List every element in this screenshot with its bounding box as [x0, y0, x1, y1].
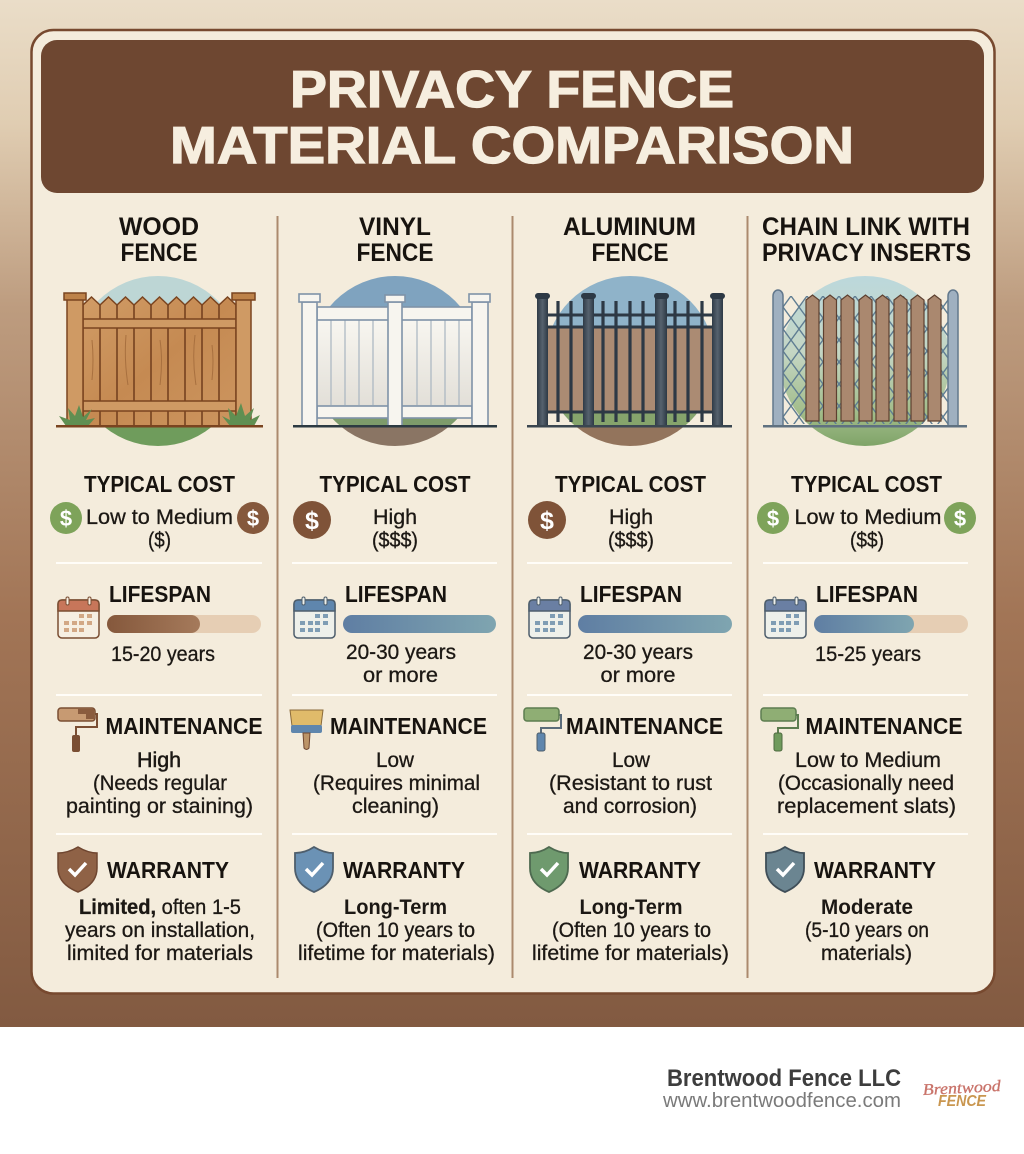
icon: dollar coin: $ — [540, 507, 554, 535]
heading: chain link: PRIVACY INSERTS — [762, 239, 971, 267]
maintenance: wood: (Needs regular — [93, 772, 227, 795]
maintenance: chain link: MAINTENANCE — [806, 713, 962, 739]
icon: dollar coin brown: $ — [247, 506, 259, 531]
maintenance: aluminum: (Resistant to rust — [549, 772, 712, 795]
icon: shield — [58, 847, 97, 892]
footer: company name and website — [662, 1065, 901, 1112]
typical cost: wood: ($) — [148, 529, 171, 552]
heading: wood fence: WOOD — [119, 213, 199, 241]
heading: vinyl fence: VINYL — [359, 213, 431, 241]
icon: calendar — [529, 597, 570, 638]
lifespan bar — [578, 615, 732, 633]
warranty: chain link: Moderate — [821, 896, 913, 919]
title banner: MATERIAL COMPARISON — [170, 117, 854, 175]
typical cost: aluminum: High — [609, 506, 653, 529]
section dividers — [56, 563, 968, 834]
warranty: wood: WARRANTY — [107, 857, 229, 883]
icon: dollar coin: $ — [305, 507, 319, 535]
heading: aluminum fence: FENCE — [592, 239, 668, 267]
warranty: aluminum — [530, 847, 729, 965]
warranty: vinyl: WARRANTY — [343, 857, 465, 883]
icon: dollar coin — [293, 501, 331, 539]
typical cost: aluminum: TYPICAL COST — [555, 471, 706, 497]
column dividers — [278, 216, 748, 978]
typical cost: aluminum: ($$$) — [608, 529, 654, 552]
maintenance: chain link — [761, 708, 962, 818]
icon: dollar coin green: $ — [767, 506, 779, 531]
warranty: vinyl — [295, 847, 495, 965]
icon: dollar coin green: $ — [954, 506, 966, 531]
lifespan: aluminum — [529, 581, 732, 687]
illustration: aluminum fence — [527, 270, 732, 451]
typical cost: chain link: TYPICAL COST — [791, 471, 942, 497]
lifespan: chain link: 15-25 years — [815, 643, 921, 666]
lifespan bar — [107, 615, 261, 633]
maintenance: aluminum: MAINTENANCE — [566, 713, 723, 739]
typical cost: wood: Low to Medium — [86, 506, 233, 529]
icon: dollar coin brown — [237, 502, 269, 534]
warranty: wood: years on installation, — [65, 919, 255, 942]
icon: shield — [295, 847, 333, 892]
lifespan: aluminum: LIFESPAN — [580, 581, 682, 607]
maintenance: aluminum: and corrosion) — [563, 795, 697, 818]
warranty: wood: Limited, often 1-5 — [79, 896, 241, 919]
warranty: vinyl: (Often 10 years to — [316, 919, 475, 942]
icon: calendar — [294, 597, 335, 638]
icon: calendar — [58, 597, 99, 638]
title banner — [41, 40, 984, 193]
lifespan bar — [814, 615, 968, 633]
maintenance: aluminum: Low — [612, 749, 651, 772]
icon: shield — [530, 847, 568, 892]
warranty: aluminum: WARRANTY — [579, 857, 701, 883]
warranty: aluminum: (Often 10 years to — [552, 919, 711, 942]
typical cost: chain link: ($$) — [850, 529, 884, 552]
maintenance: wood: painting or staining) — [66, 795, 253, 818]
warranty: chain link: (5-10 years on — [805, 919, 929, 942]
footer: logo: FENCE — [938, 1093, 987, 1110]
heading: chain link — [762, 213, 971, 267]
lifespan: vinyl — [294, 581, 496, 687]
lifespan: chain link: LIFESPAN — [816, 581, 918, 607]
lifespan: aluminum: or more — [600, 664, 676, 687]
column: wood fence — [50, 213, 269, 965]
maintenance: chain link: (Occasionally need — [778, 772, 954, 795]
icon: paint roller — [524, 708, 561, 751]
lifespan: vinyl: LIFESPAN — [345, 581, 447, 607]
column: vinyl fence — [290, 213, 497, 965]
typical cost: wood — [50, 471, 269, 552]
maintenance: vinyl: (Requires minimal — [313, 772, 480, 795]
main panel — [32, 30, 994, 994]
maintenance: chain link: Low to Medium — [795, 749, 941, 772]
maintenance: wood — [58, 708, 262, 818]
illustration: chain link fence — [763, 276, 967, 446]
typical cost: aluminum — [528, 471, 706, 552]
maintenance: wood: MAINTENANCE — [106, 713, 262, 739]
warranty: aluminum: lifetime for materials) — [532, 942, 729, 965]
warranty: chain link: WARRANTY — [814, 857, 936, 883]
warranty: vinyl: lifetime for materials) — [298, 942, 495, 965]
typical cost: vinyl: High — [373, 506, 417, 529]
heading: wood fence — [119, 213, 199, 267]
icon: dollar coin green: $ — [60, 506, 72, 531]
warranty: chain link — [766, 847, 936, 965]
lifespan: vinyl: or more — [363, 664, 438, 687]
illustration: wood fence — [56, 270, 263, 451]
lifespan bar — [343, 615, 496, 633]
warranty: chain link: materials) — [821, 942, 912, 965]
lifespan: wood: LIFESPAN — [109, 581, 211, 607]
warranty: wood — [58, 847, 255, 965]
icon: paint brush — [290, 710, 323, 750]
typical cost: wood: TYPICAL COST — [84, 471, 235, 497]
heading: chain link: CHAIN LINK WITH — [762, 213, 970, 241]
heading: vinyl fence — [356, 213, 434, 267]
typical cost: vinyl — [293, 471, 470, 552]
footer: logo — [922, 1078, 1002, 1110]
column: aluminum fence — [524, 213, 732, 965]
maintenance: aluminum — [524, 708, 723, 818]
icon: dollar coin green — [944, 502, 976, 534]
lifespan: chain link — [765, 581, 968, 666]
warranty: aluminum: Long-Term — [580, 896, 682, 919]
icon: dollar coin green — [757, 502, 789, 534]
maintenance: vinyl: MAINTENANCE — [330, 713, 487, 739]
footer: logo: Brentwood — [922, 1078, 1002, 1099]
typical cost: chain link: Low to Medium — [794, 506, 942, 529]
icon: shield — [766, 847, 804, 892]
typical cost: vinyl: ($$$) — [372, 529, 418, 552]
heading: aluminum fence — [563, 213, 696, 267]
typical cost: vinyl: TYPICAL COST — [320, 471, 470, 497]
maintenance: vinyl: Low — [376, 749, 415, 772]
icon: calendar — [765, 597, 806, 638]
column: chain link with privacy inserts — [757, 213, 976, 965]
footer: company name and website: Brentwood Fence LLC — [667, 1065, 901, 1092]
footer: company name and website: www.brentwoodfence.com — [662, 1090, 901, 1112]
maintenance: chain link: replacement slats) — [777, 795, 956, 818]
lifespan: wood — [58, 581, 261, 666]
warranty: wood: limited for materials — [67, 942, 253, 965]
illustration: vinyl fence — [293, 270, 497, 451]
lifespan: vinyl: 20-30 years — [346, 641, 456, 664]
maintenance: wood: High — [137, 749, 181, 772]
maintenance: vinyl: cleaning) — [352, 795, 439, 818]
heading: aluminum fence: ALUMINUM — [563, 213, 696, 241]
heading: vinyl fence: FENCE — [356, 239, 434, 267]
maintenance: vinyl — [290, 710, 487, 818]
title banner: PRIVACY FENCE — [290, 61, 734, 119]
lifespan: wood: 15-20 years — [111, 643, 215, 666]
warranty: vinyl: Long-Term — [344, 896, 447, 919]
heading: wood fence: FENCE — [120, 239, 198, 267]
lifespan: aluminum: 20-30 years — [583, 641, 693, 664]
icon: dollar coin — [528, 501, 566, 539]
typical cost: chain link — [757, 471, 976, 552]
icon: paint roller — [761, 708, 798, 751]
icon: dollar coin green — [50, 502, 82, 534]
icon: paint roller — [58, 708, 97, 752]
